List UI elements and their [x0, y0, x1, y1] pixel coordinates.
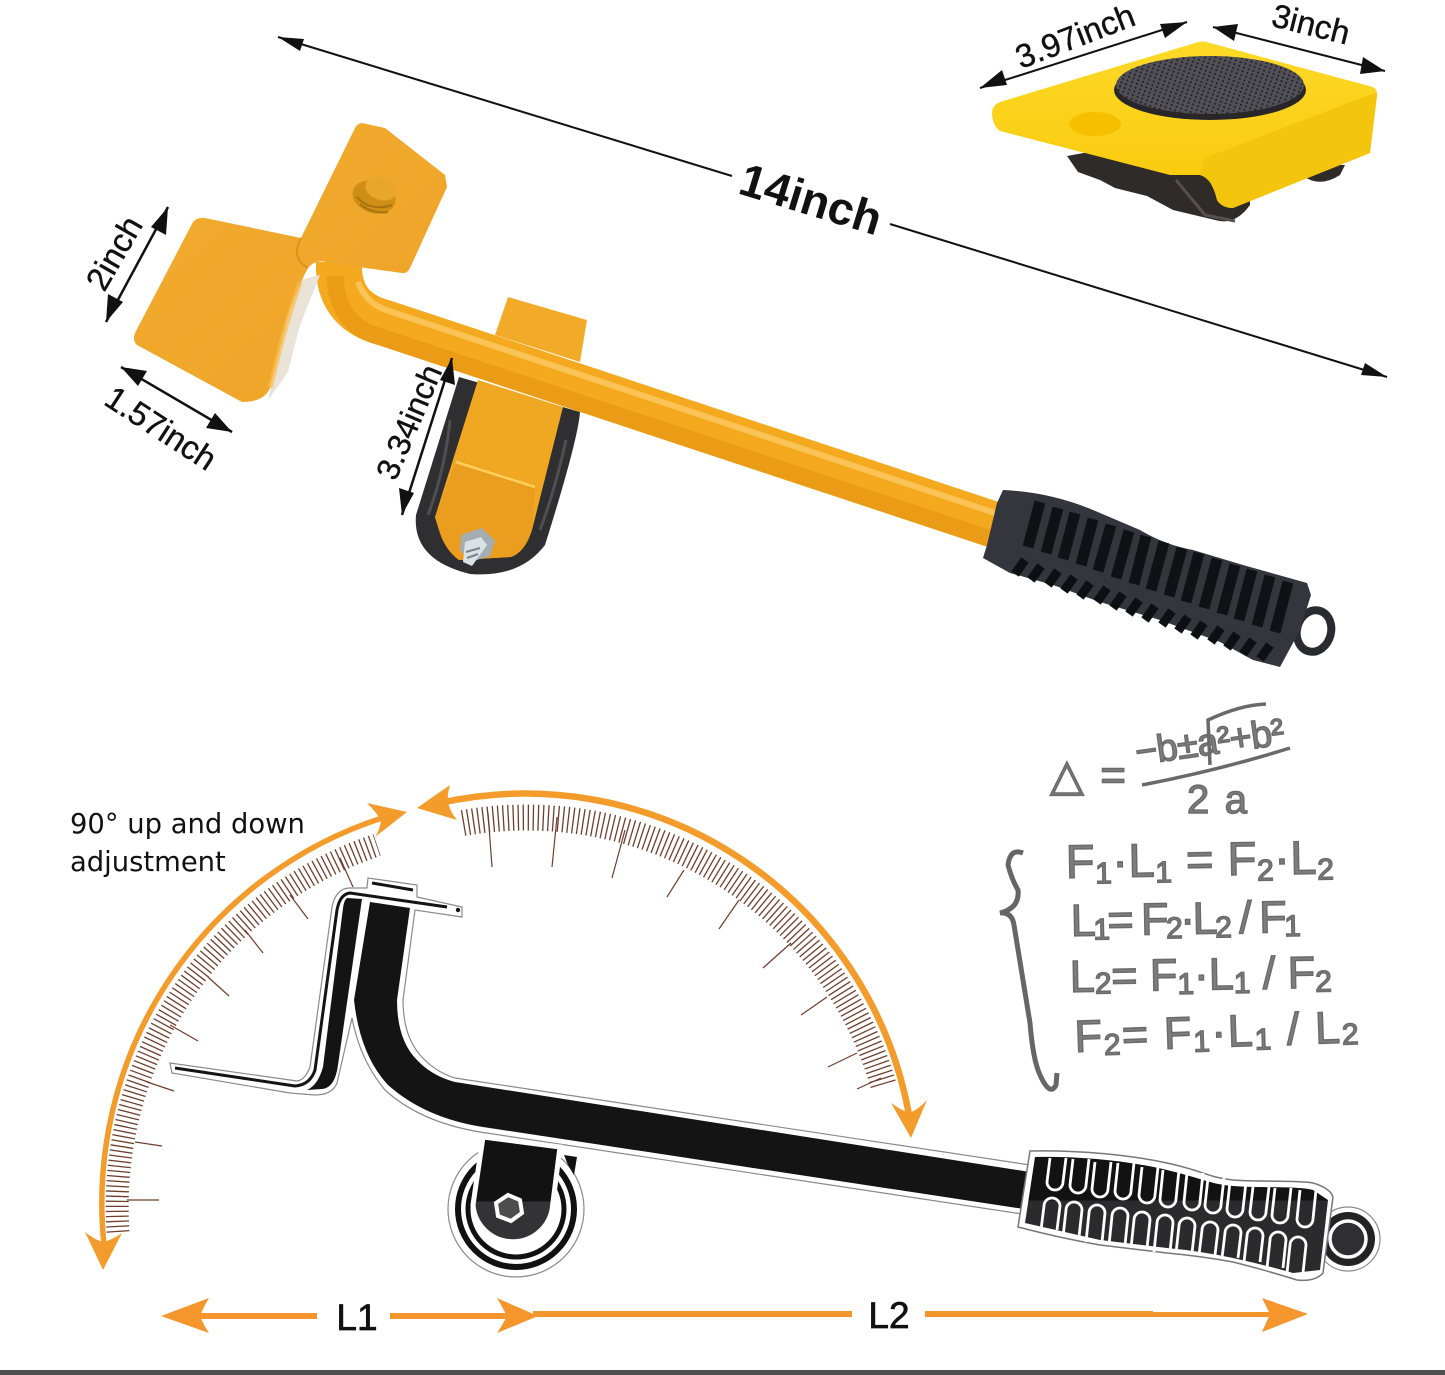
dolly body [992, 42, 1377, 208]
lever equation 4: F [1074, 1010, 1103, 1062]
diagram foot plate [175, 883, 460, 1090]
lever equation 1: 2 [1257, 854, 1274, 888]
caster dolly photo [992, 42, 1377, 221]
bottom edge bar [0, 1370, 1445, 1375]
lever equation 4: 1 [1254, 1023, 1272, 1057]
dimension: 3.34inch roller length: 3.34inch [369, 359, 449, 485]
diagram lever outline [170, 878, 1030, 1214]
lever equation 4: 1 [1193, 1025, 1210, 1059]
lever equation 2: L [1070, 895, 1096, 946]
upper bracket tab [495, 297, 587, 362]
roller wheel [416, 377, 580, 574]
diagram wheel bracket [473, 1137, 577, 1242]
delta formula [1050, 704, 1290, 822]
lever equation 2: 2 [1215, 911, 1232, 944]
rubber grip [983, 490, 1311, 667]
lever equation 1: = F [1172, 832, 1257, 886]
L1 arrows and label [161, 1297, 538, 1338]
dimension: 14inch overall length [278, 37, 1387, 377]
rubber pad [1114, 56, 1306, 120]
lever equation 3: / F [1250, 947, 1316, 999]
lever equation 2: 1 [1093, 913, 1110, 947]
lever equation 1: F [1065, 835, 1095, 888]
lever equation 4: = F [1121, 1007, 1192, 1060]
handwritten formulas [1000, 704, 1359, 1089]
curly brace [1000, 852, 1057, 1089]
diagram wheel [448, 1141, 584, 1277]
lever equation 2: / F [1229, 891, 1287, 943]
dimension: 1.57inch plate depth: 1.57inch [99, 379, 223, 477]
dimension: 3inch dolly depth [1213, 0, 1385, 74]
bent foot plate with vertical flange [134, 123, 447, 402]
delta formula: 2a [1187, 778, 1248, 822]
lever equation 1: ·L [1112, 833, 1155, 887]
dimension: 2inch plate width: 2inch [78, 210, 150, 296]
label: 90 degree adjustment: adjustment [70, 847, 226, 878]
lever equation 3: ·L [1193, 948, 1234, 1000]
dimension: 3.97inch dolly width [980, 0, 1187, 88]
L2 arrows and label: L2 [868, 1295, 910, 1336]
lever equation 3: 1 [1177, 968, 1194, 1001]
orange arc arrow: right [417, 785, 927, 1138]
delta formula: −b±a²+b² [1132, 711, 1287, 774]
diagram grip end ring [1316, 1207, 1380, 1271]
caster wheels [1067, 150, 1345, 221]
label: 90 degree adjustment: 90° up and down [70, 809, 305, 840]
lever equation 3: 2 [1095, 967, 1112, 1001]
dimension: 14inch overall length: 14inch [734, 153, 888, 245]
underside shadow of the bent plate [268, 275, 320, 400]
lever equation 1: ·L [1274, 831, 1317, 884]
lever equation 3: L [1069, 951, 1095, 1002]
grip loop [1292, 606, 1336, 656]
threaded stud [348, 174, 400, 219]
dolly handle socket [1069, 112, 1121, 136]
diagram lever bar [354, 902, 1030, 1209]
L2 arrows and label [533, 1295, 1308, 1336]
lever equation 2: 1 [1284, 910, 1301, 943]
diagram grip [1018, 1151, 1333, 1280]
lever equation 4: 2 [1103, 1028, 1121, 1062]
dolly right side face [1200, 92, 1377, 208]
lever equation 1: 1 [1095, 857, 1112, 890]
lever equation 2: = F [1107, 893, 1169, 945]
lever equation 4: ·L [1210, 1005, 1254, 1057]
lifter photo: yellow lever bar with grip and roller [134, 123, 1336, 667]
steel tube [335, 262, 1004, 542]
lever equation 3: 1 [1234, 967, 1251, 1000]
left protractor scale [117, 845, 377, 1232]
right protractor scale [463, 813, 884, 1089]
lever equation 4: / L [1272, 1002, 1341, 1055]
lever equation 1: 2 [1317, 853, 1334, 887]
dimension: 2inch plate width [78, 207, 168, 322]
lever equation 2: 2 [1166, 912, 1183, 945]
lever equation 3: 2 [1315, 965, 1332, 999]
delta formula: △ = [1050, 751, 1126, 800]
orange arc arrow: left [85, 803, 407, 1270]
lever equation 4: 2 [1341, 1018, 1359, 1052]
lower bracket [435, 380, 563, 560]
lever equation 2: ·L [1180, 892, 1218, 944]
axle bolt [460, 528, 495, 566]
lever equation 1: 1 [1155, 856, 1172, 889]
L1 arrows and label: L1 [336, 1297, 378, 1338]
lever diagram [170, 878, 1380, 1280]
lever equation 3: = F [1111, 949, 1178, 1001]
